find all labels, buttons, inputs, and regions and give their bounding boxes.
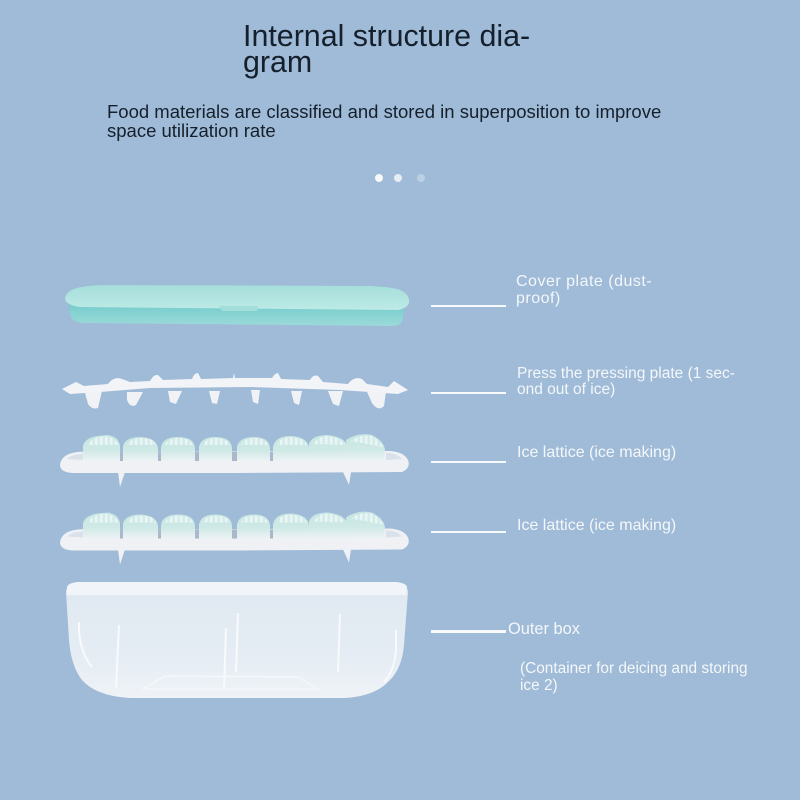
cover plate lid: [65, 285, 409, 326]
label: container note: ice 2): [520, 677, 558, 694]
label: pressing plate: ond out of ice): [517, 381, 615, 398]
leader line: ice lattice upper: [431, 461, 506, 463]
title: gram: [243, 45, 312, 79]
label: pressing plate: Press the pressing plate (1 sec-: [517, 365, 735, 382]
title: Internal structure dia-: [243, 19, 530, 53]
leader line: cover plate: [431, 305, 506, 307]
description: space utilization rate: [107, 120, 276, 141]
label: cover plate: proof): [516, 290, 561, 307]
outer box: [66, 582, 408, 698]
label: ice lattice lower: Ice lattice (ice making): [517, 517, 676, 534]
leader line: ice lattice lower: [431, 531, 506, 533]
pagination dots: [375, 174, 425, 182]
leader line: outer box: [431, 630, 506, 633]
leader line: pressing plate: [431, 392, 506, 394]
label: ice lattice upper: Ice lattice (ice making): [517, 444, 676, 461]
description: Food materials are classified and stored in superposition to improve: [107, 101, 661, 122]
ice lattice upper: [60, 434, 409, 487]
label: cover plate: Cover plate (dust-: [516, 273, 652, 290]
ice lattice lower: [60, 512, 409, 564]
label: outer box: Outer box: [508, 620, 581, 638]
label: container note: (Container for deicing and storing: [520, 660, 748, 677]
pressing plate: [62, 373, 408, 408]
